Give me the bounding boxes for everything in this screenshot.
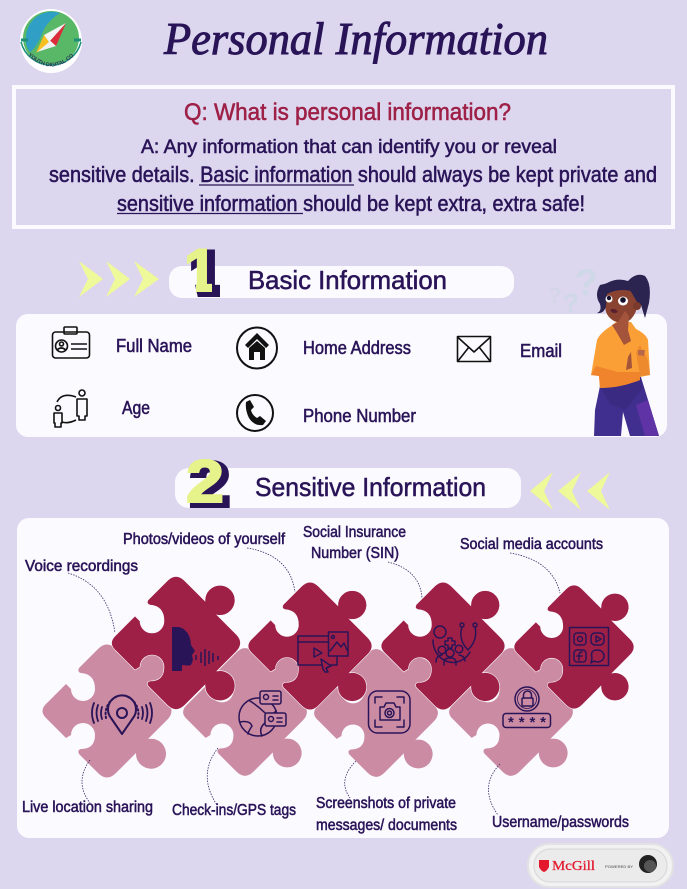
- icon: lock and password: ****: [508, 714, 546, 731]
- number 1: [187, 248, 220, 297]
- face: [605, 288, 637, 323]
- partner seal: [639, 855, 657, 873]
- panel: sensitive information: [17, 518, 669, 838]
- label: social insurance number: [303, 524, 406, 562]
- badge: mcgill powered by: [528, 844, 673, 887]
- item: full name: [52, 327, 192, 358]
- label: screenshots: messages/ documents: [316, 817, 457, 834]
- icon: globe with check-in cards: [239, 691, 286, 736]
- trousers: [594, 374, 659, 436]
- item: home address: [237, 328, 411, 368]
- question heading: Q: What is personal information?: [184, 99, 511, 126]
- label: photos and videos: Photos/videos of yourself: [123, 531, 286, 548]
- mcgill wordmark: McGill: [552, 859, 595, 874]
- item: email: Email: [520, 341, 562, 361]
- label: check-ins and gps tags: Check-ins/GPS tags: [172, 802, 296, 819]
- number 2: 2: [186, 448, 224, 515]
- orange sweater: [591, 322, 650, 388]
- number 2: 2: [191, 451, 229, 518]
- question marks behind person: ?: [575, 262, 598, 303]
- title: Personal Information: [163, 13, 548, 64]
- icon: social media apps: [570, 628, 608, 666]
- number 1: 1: [190, 240, 223, 307]
- section 1 heading pill: [169, 248, 514, 298]
- section 2 heading pill: [175, 448, 521, 518]
- answer text: A: Any information that can identify you or reveal: [141, 137, 557, 158]
- icon: envelope: [458, 336, 490, 362]
- panel: basic information: [16, 314, 667, 437]
- powered by: POWERED BY: [605, 864, 633, 869]
- label: live location sharing: Live location sharing: [22, 799, 153, 816]
- hair front: [597, 282, 631, 313]
- item: home address: Home Address: [303, 338, 411, 358]
- item: phone number: Phone Number: [303, 406, 416, 426]
- answer text: [49, 137, 657, 216]
- label: username and passwords: Username/passwords: [492, 814, 629, 831]
- question marks behind person: [548, 262, 598, 318]
- mcgill crest: [539, 860, 549, 872]
- item: age: [54, 390, 150, 427]
- hair: [598, 275, 650, 318]
- answer text: sensitive information should be kept extra, extra safe!: [117, 191, 585, 216]
- puzzle: light pieces: [42, 644, 573, 778]
- label: social insurance number: Number (SIN): [311, 545, 399, 562]
- question marks behind person: ?: [563, 288, 579, 318]
- icon: house: [237, 328, 277, 368]
- icon: screenshot camera: [368, 691, 410, 733]
- logo: youth digital compass: [20, 9, 82, 73]
- icon: lock and password: [503, 687, 550, 731]
- label: voice recordings: Voice recordings: [25, 558, 138, 575]
- label: social insurance number: Social Insurance: [303, 524, 406, 541]
- icon: live location: [92, 695, 152, 734]
- icon: id badge: [52, 327, 90, 358]
- number 1: 1: [184, 237, 217, 304]
- icon: voice recording: [172, 627, 218, 671]
- item: phone number: [237, 395, 416, 431]
- label: screenshots: Screenshots of private: [316, 795, 456, 812]
- panel: question and answer: [14, 87, 673, 227]
- label: social media accounts: Social media accounts: [460, 536, 603, 553]
- eyes: [606, 296, 628, 306]
- chevrons: section 1: [79, 261, 159, 297]
- icon: photos and videos: [298, 632, 348, 672]
- heading: sensitive information: Sensitive Information: [255, 472, 486, 502]
- item: age: Age: [122, 398, 150, 418]
- icon: people growing: [54, 390, 87, 427]
- item: email: [458, 336, 562, 362]
- icon: telephone: [237, 395, 273, 431]
- connector lines: [68, 548, 560, 815]
- question marks behind person: ?: [548, 283, 561, 308]
- illustration: thinking person: [591, 275, 659, 436]
- item: full name: Full Name: [116, 336, 192, 356]
- icon: health and family: [433, 623, 477, 665]
- heading: basic information: Basic Information: [248, 265, 447, 295]
- chevrons: section 2: [530, 472, 610, 510]
- puzzle: dark pieces: [112, 576, 634, 710]
- hand and arm: [612, 311, 631, 345]
- label: screenshots: [316, 795, 457, 834]
